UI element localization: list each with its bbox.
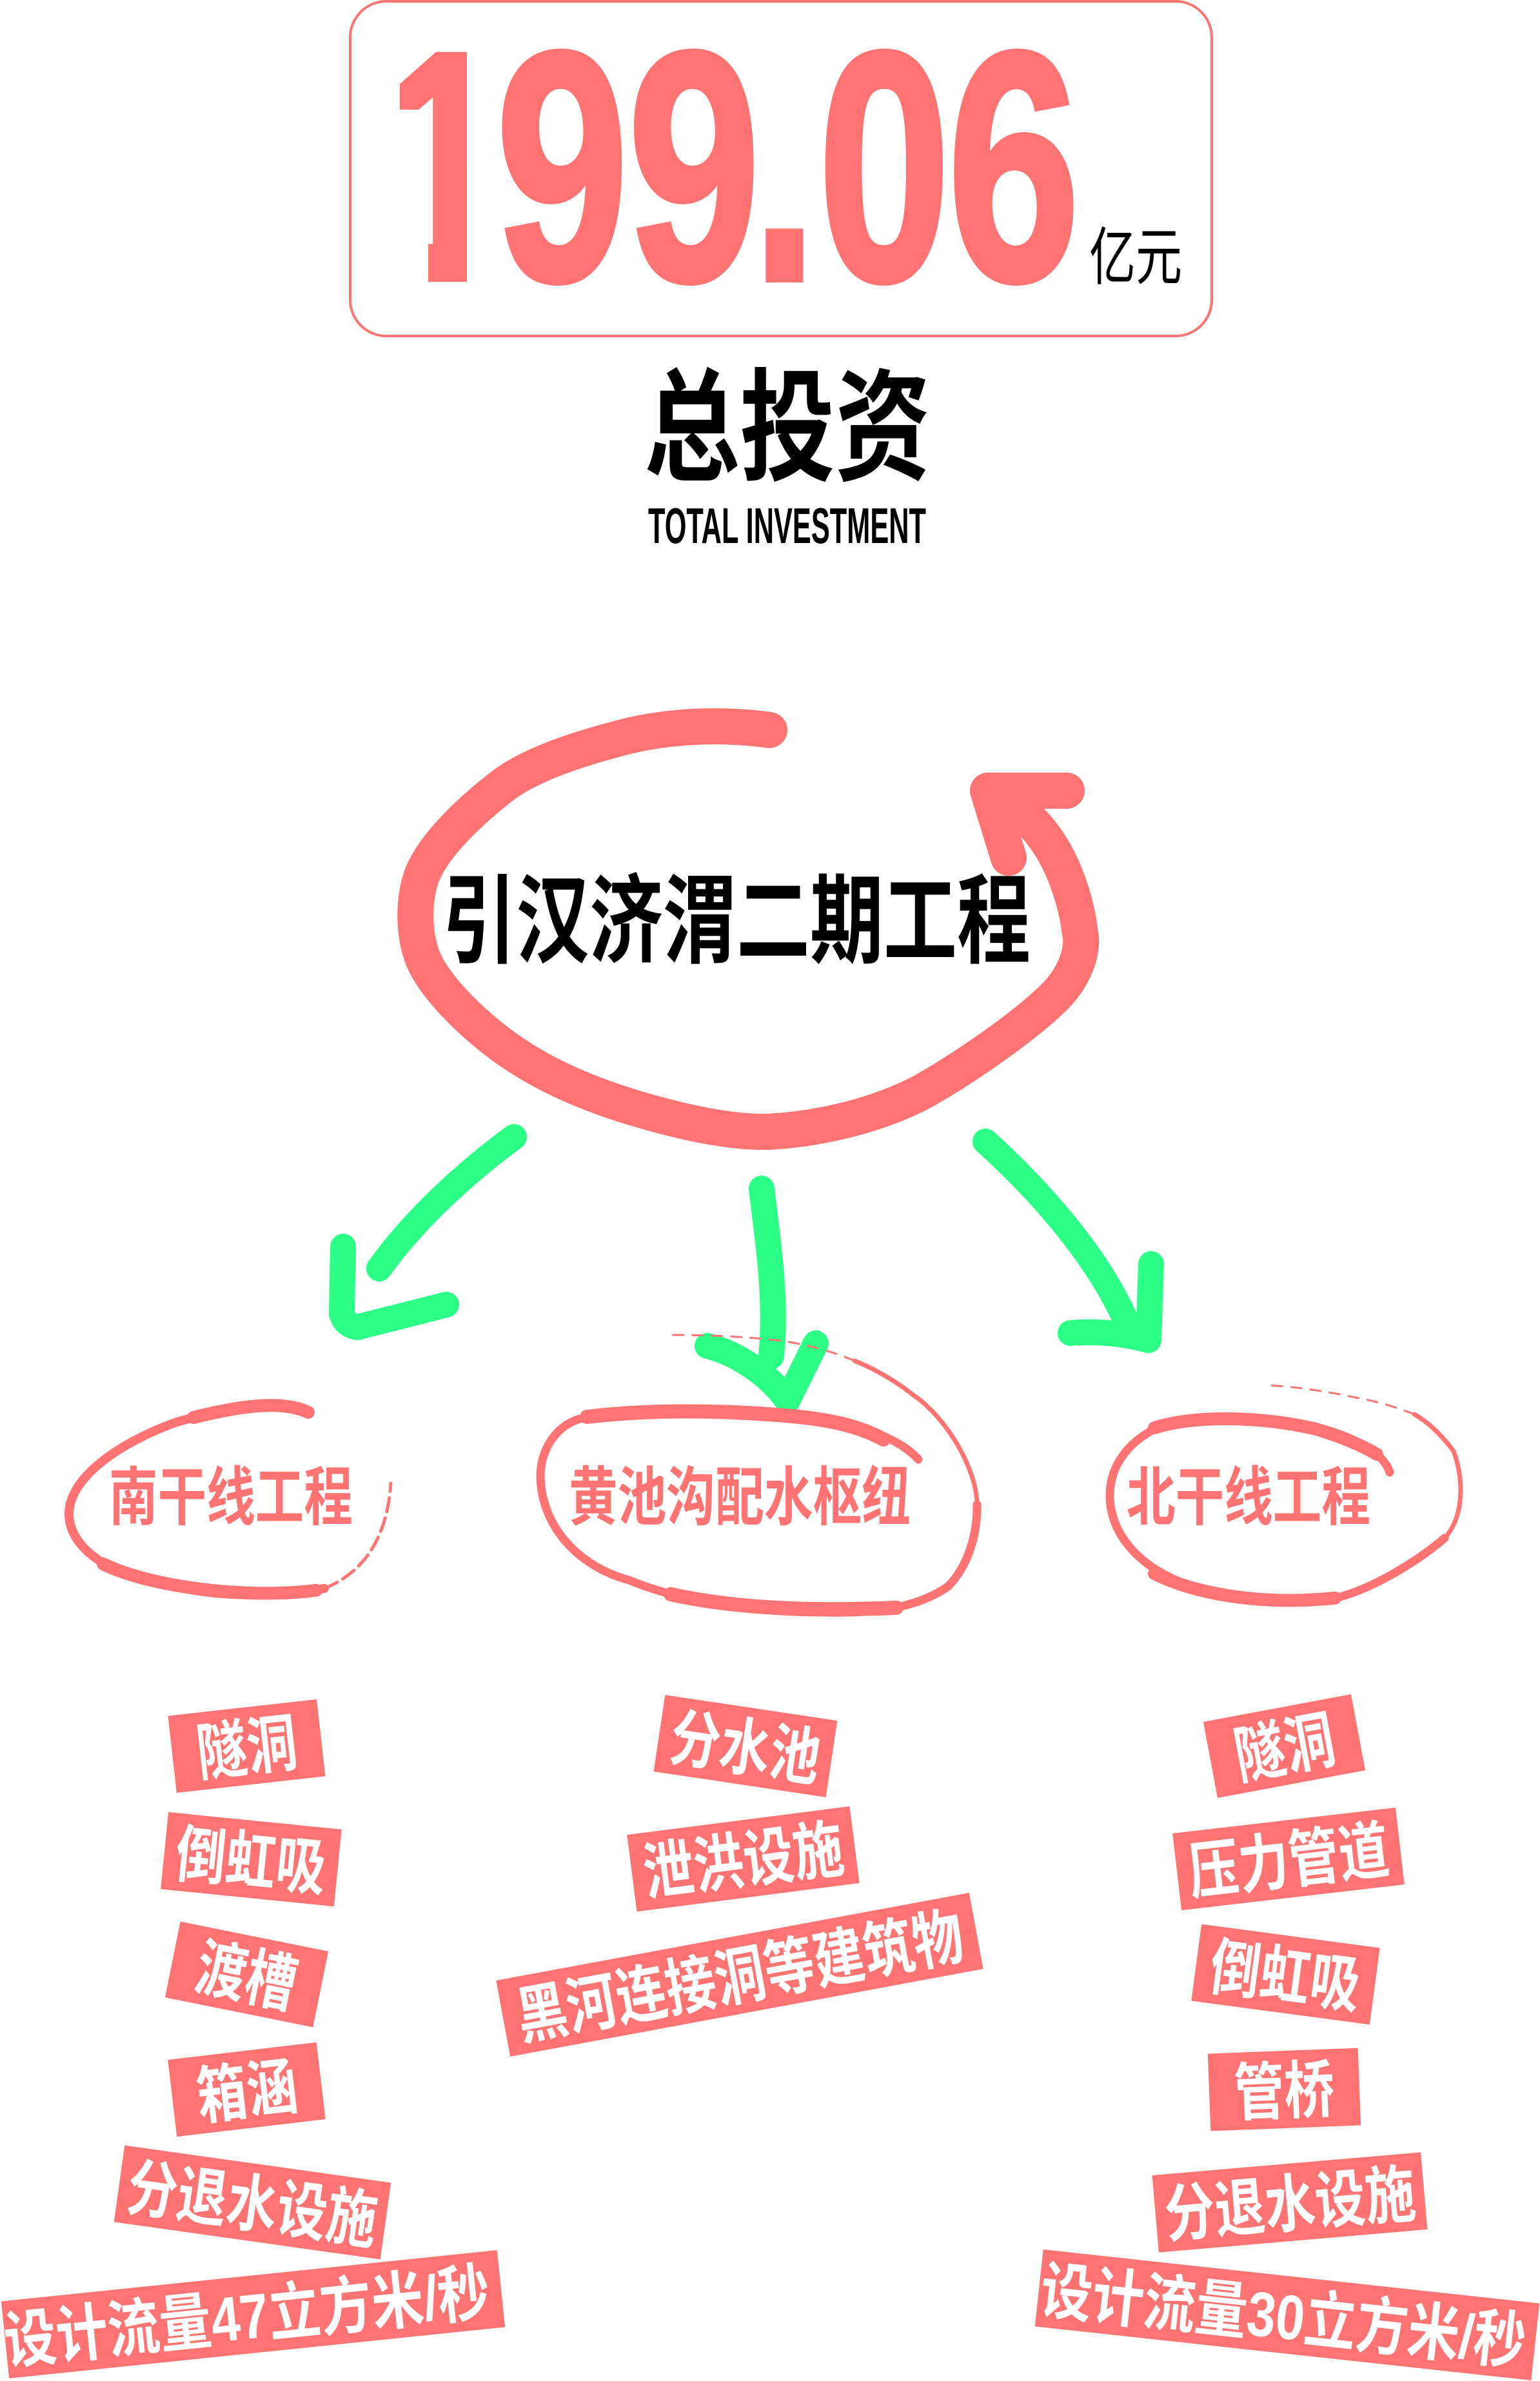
tag: south tunnel: 隧洞 xyxy=(193,1708,301,1789)
tag: north tunnel: 隧洞 xyxy=(1229,1704,1341,1792)
heading: total investment: 总投资 xyxy=(644,361,931,497)
arrow: to south main line xyxy=(342,1137,514,1327)
circle: huangchigou water distribution hub xyxy=(540,1335,977,1612)
arrow head of loop xyxy=(988,791,1067,858)
unit: yi yuan: 亿元 xyxy=(1089,222,1182,293)
tag: south design flow: 设计流量47立方米/秒 xyxy=(1,2257,493,2377)
tag: north design flow: 设计流量30立方米/秒 xyxy=(1037,2255,1529,2378)
tag: south aqueduct xyxy=(165,1922,328,2027)
circle label: 北干线工程 xyxy=(1127,1461,1370,1533)
circle: north main line xyxy=(1110,1385,1461,1603)
tag: hub heihe connection tunnel: 黑河连接洞等建筑物 xyxy=(511,1901,969,2053)
tag: south aqueduct: 渡槽 xyxy=(190,1932,302,2021)
title: project name: 引汉济渭二期工程 xyxy=(442,867,1031,976)
tag: south box culvert xyxy=(168,2042,326,2137)
tag: north pipe bridge xyxy=(1208,2048,1361,2131)
arrow: to huangchigou hub xyxy=(707,1189,816,1401)
arrow: to north main line xyxy=(985,1141,1151,1340)
english subheading: TOTAL INVESTMENT xyxy=(648,497,926,554)
tag: north pipe bridge: 管桥 xyxy=(1233,2055,1336,2129)
tag: south box culvert: 箱涵 xyxy=(193,2051,301,2133)
tag: hub distribution pool: 分水池 xyxy=(666,1702,825,1794)
tag: hub flood discharge facility: 泄洪设施 xyxy=(639,1813,848,1909)
brush loop arrow around project title xyxy=(415,726,1081,1132)
circle: south main line xyxy=(69,1405,391,1595)
tag: north tunnel xyxy=(1203,1694,1365,1798)
total investment number box xyxy=(350,0,1212,350)
circle label: 南干线工程 xyxy=(109,1461,353,1533)
tag: north diversion facility: 分退水设施 xyxy=(1161,2159,1418,2250)
tag: north pressure pipeline: 压力管道 xyxy=(1185,1815,1393,1908)
tag: north inverted siphon: 倒虹吸 xyxy=(1206,1931,1365,2021)
tag: south tunnel xyxy=(168,1699,325,1793)
tag: south diversion facility: 分退水设施 xyxy=(123,2152,382,2257)
tag: south inverted siphon: 倒虹吸 xyxy=(172,1819,330,1904)
circle label: 黄池沟配水枢纽 xyxy=(569,1461,911,1533)
